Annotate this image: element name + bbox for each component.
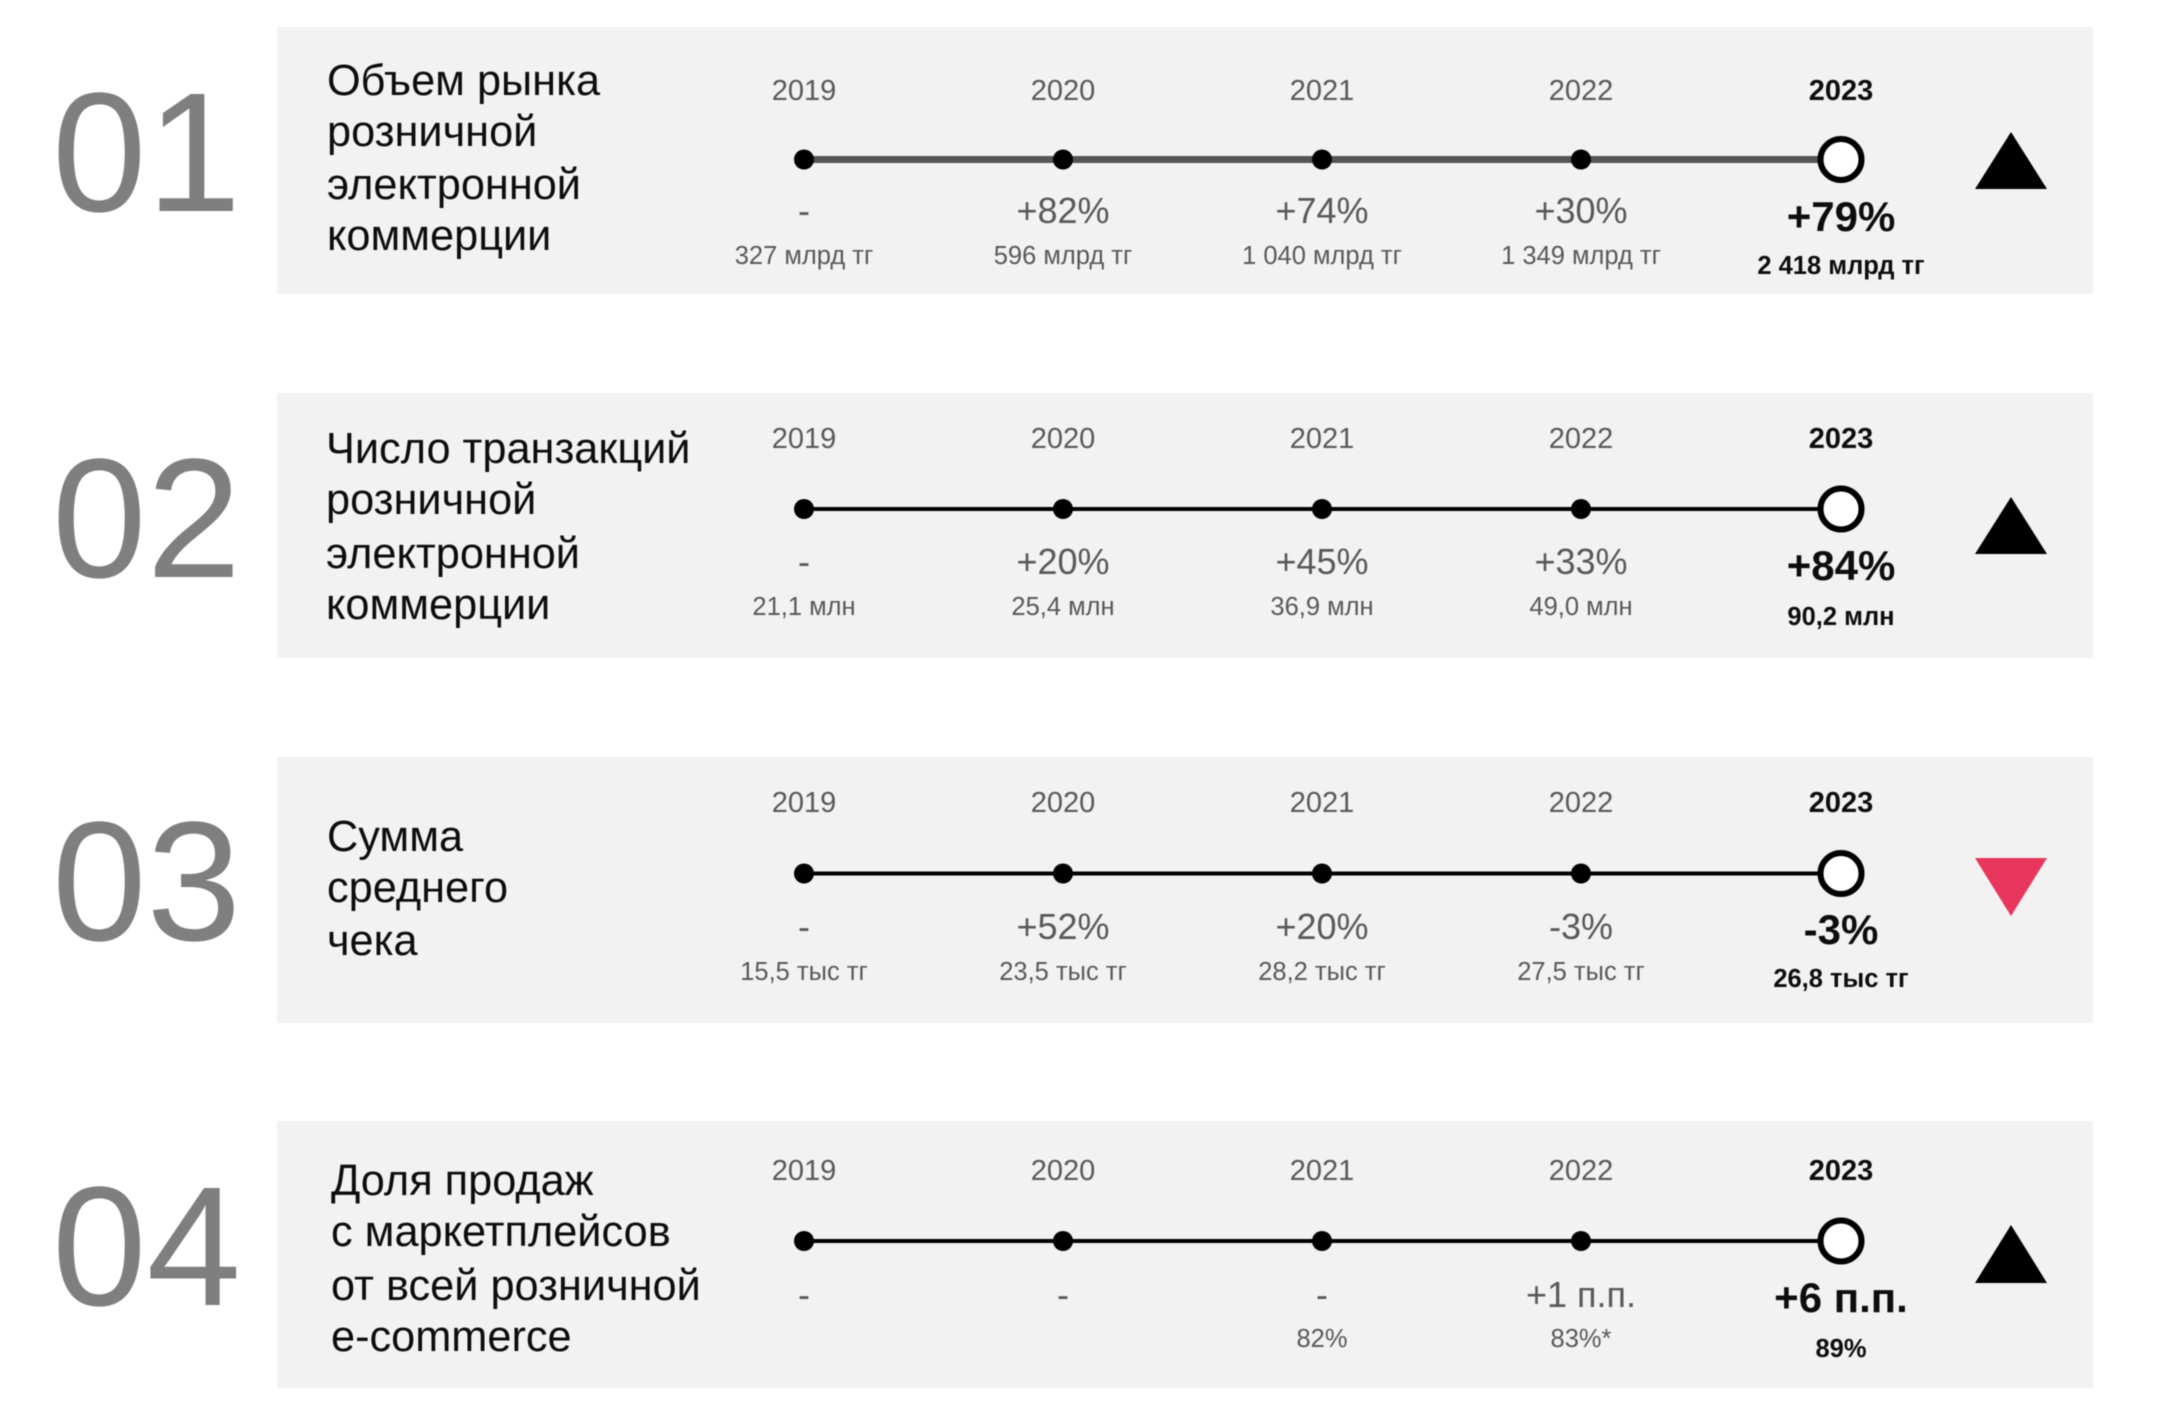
year labels row 02: 2019	[772, 423, 836, 455]
growth values row 01	[798, 190, 1895, 240]
growth values row 04: -	[1316, 1274, 1328, 1315]
year labels row 03: 2020	[1031, 787, 1095, 819]
panel: row 02 transactions	[52, 393, 2093, 658]
icon: up triangle row 01	[1975, 132, 2047, 189]
row number 02: 02	[52, 424, 241, 614]
panel: row 01 market volume	[52, 27, 2093, 294]
heading: marketplaces share: Доля продаж	[331, 1157, 594, 1205]
absolute values row 03: 15,5 тыс тг	[740, 958, 868, 986]
icon: down triangle row 03	[1975, 858, 2047, 916]
absolute values row 02: 49,0 млн	[1529, 593, 1633, 621]
absolute values row 02: 25,4 млн	[1011, 593, 1115, 621]
year labels row 02: 2020	[1031, 423, 1095, 455]
year labels row 03	[772, 787, 1873, 819]
growth values row 02: +33%	[1534, 541, 1628, 582]
year labels row 01: 2023	[1809, 75, 1873, 107]
row number 04: 04	[52, 1152, 241, 1342]
growth values row 03: -	[798, 906, 810, 947]
year labels row 01	[772, 75, 1873, 107]
year labels row 04: 2022	[1549, 1155, 1613, 1187]
growth values row 03: +52%	[1016, 906, 1110, 947]
growth values row 03: -3%	[1549, 906, 1613, 947]
absolute values row 01	[735, 242, 1925, 280]
year labels row 04: 2019	[772, 1155, 836, 1187]
heading: market volume: электронной	[327, 161, 581, 209]
growth values row 02: +20%	[1016, 541, 1110, 582]
absolute values row 02	[752, 593, 1895, 631]
growth values row 02: -	[798, 541, 810, 582]
year labels row 01: 2021	[1290, 75, 1354, 107]
heading: transactions: коммерции	[326, 581, 550, 629]
timeline row 04	[794, 1220, 1862, 1262]
panel: row 04 marketplaces share	[52, 1121, 2093, 1388]
absolute values row 04	[1296, 1325, 1867, 1363]
growth values row 01: +79%	[1787, 193, 1895, 240]
year labels row 03: 2022	[1549, 787, 1613, 819]
icon: up triangle row 02	[1975, 497, 2047, 554]
growth values row 04	[798, 1274, 1908, 1321]
panel background 04	[277, 1121, 2093, 1388]
heading: average check: среднего	[327, 864, 508, 912]
year labels row 02: 2022	[1549, 423, 1613, 455]
row number 01: 01	[52, 58, 241, 248]
icon: up triangle row 04	[1975, 1225, 2047, 1283]
absolute values row 01: 1 040 млрд тг	[1242, 242, 1402, 270]
growth values row 01: -	[798, 190, 810, 231]
absolute values row 01: 2 418 млрд тг	[1757, 252, 1925, 280]
year labels row 02	[772, 423, 1873, 455]
growth values row 03: -3%	[1804, 906, 1878, 953]
panel background 03	[277, 757, 2093, 1023]
absolute values row 02: 90,2 млн	[1787, 603, 1895, 631]
heading: transactions: Число транзакций	[326, 425, 690, 473]
absolute values row 03: 26,8 тыс тг	[1773, 965, 1909, 993]
growth values row 02	[798, 541, 1895, 589]
heading: average check: чека	[327, 917, 419, 965]
growth values row 03	[798, 906, 1878, 953]
absolute values row 01: 596 млрд тг	[994, 242, 1132, 270]
absolute values row 04: 82%	[1296, 1325, 1348, 1353]
absolute values row 04: 89%	[1815, 1335, 1867, 1363]
heading: transactions: электронной	[326, 530, 580, 578]
year labels row 01: 2019	[772, 75, 836, 107]
heading: marketplaces share: от всей розничной	[331, 1262, 701, 1310]
absolute values row 01: 1 349 млрд тг	[1501, 242, 1661, 270]
growth values row 04: -	[1057, 1274, 1069, 1315]
growth values row 02: +84%	[1787, 542, 1895, 589]
absolute values row 03: 27,5 тыс тг	[1517, 958, 1645, 986]
year labels row 04: 2021	[1290, 1155, 1354, 1187]
year labels row 03: 2023	[1809, 787, 1873, 819]
absolute values row 03: 23,5 тыс тг	[999, 958, 1127, 986]
year labels row 04: 2020	[1031, 1155, 1095, 1187]
timeline row 01	[794, 139, 1862, 180]
heading: market volume: Объем рынка	[327, 57, 601, 105]
year labels row 01: 2020	[1031, 75, 1095, 107]
growth values row 01: +74%	[1275, 190, 1369, 231]
timeline row 03	[794, 853, 1862, 894]
panel background 01	[277, 27, 2093, 294]
growth values row 04: -	[798, 1274, 810, 1315]
timeline row 02	[794, 488, 1862, 530]
absolute values row 02: 21,1 млн	[752, 593, 856, 621]
absolute values row 04: 83%*	[1551, 1325, 1612, 1353]
growth values row 04: +6 п.п.	[1774, 1274, 1908, 1321]
panel: row 03 average check	[52, 757, 2093, 1023]
growth values row 01: +30%	[1534, 190, 1628, 231]
heading: market volume: розничной	[327, 108, 537, 156]
panel background 02	[277, 393, 2093, 658]
growth values row 01: +82%	[1016, 190, 1110, 231]
year labels row 02: 2021	[1290, 423, 1354, 455]
absolute values row 03	[740, 958, 1909, 993]
heading: marketplaces share: e-commerce	[331, 1313, 572, 1361]
year labels row 01: 2022	[1549, 75, 1613, 107]
absolute values row 03: 28,2 тыс тг	[1258, 958, 1386, 986]
year labels row 04: 2023	[1809, 1155, 1873, 1187]
growth values row 03: +20%	[1275, 906, 1369, 947]
heading: average check: Сумма	[327, 813, 464, 861]
growth values row 02: +45%	[1275, 541, 1369, 582]
year labels row 03: 2021	[1290, 787, 1354, 819]
heading: transactions: розничной	[326, 476, 536, 524]
absolute values row 01: 327 млрд тг	[735, 242, 873, 270]
absolute values row 02: 36,9 млн	[1270, 593, 1374, 621]
heading: marketplaces share: с маркетплейсов	[331, 1208, 671, 1256]
year labels row 03: 2019	[772, 787, 836, 819]
growth values row 04: +1 п.п.	[1526, 1274, 1636, 1315]
row number 03: 03	[52, 787, 241, 977]
heading: market volume: коммерции	[327, 212, 551, 260]
year labels row 02: 2023	[1809, 423, 1873, 455]
year labels row 04	[772, 1155, 1873, 1187]
